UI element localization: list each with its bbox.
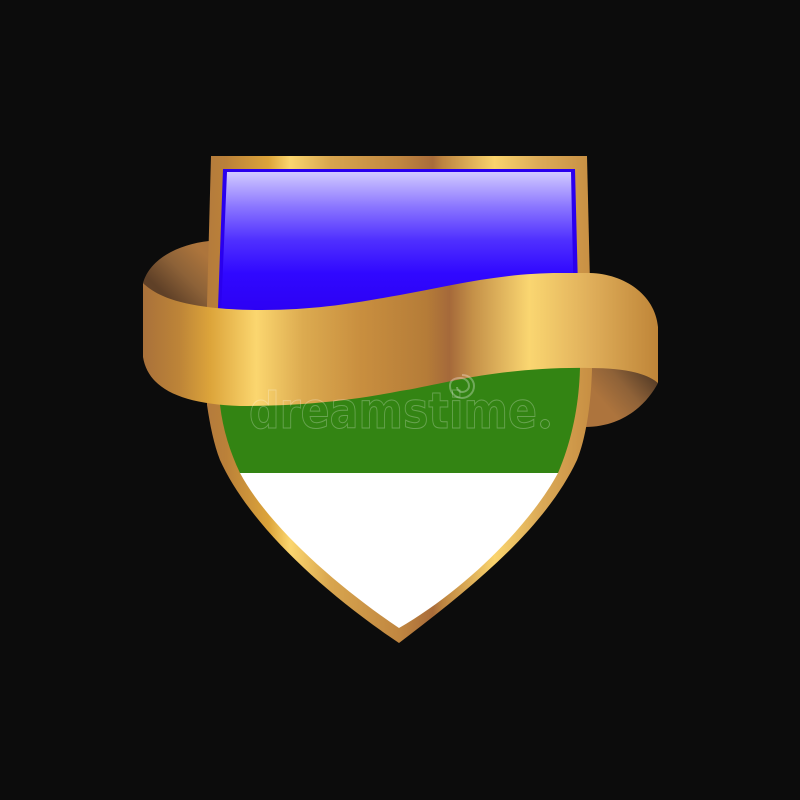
watermark wordmark: dreamstime xyxy=(249,382,537,440)
stripe: white xyxy=(240,473,558,628)
stripe: green xyxy=(220,368,580,473)
watermark: registered mark xyxy=(540,420,550,428)
stripe: blue glossy panel xyxy=(221,172,574,315)
ribbon: rear right fold xyxy=(585,368,658,427)
flag stripes xyxy=(210,165,590,643)
stripe: blue border xyxy=(218,169,578,308)
watermark: spiral logo xyxy=(450,375,474,398)
shield: gold frame xyxy=(207,156,592,643)
ribbon: rear left fold xyxy=(143,241,210,308)
ribbon: front band xyxy=(143,273,658,406)
